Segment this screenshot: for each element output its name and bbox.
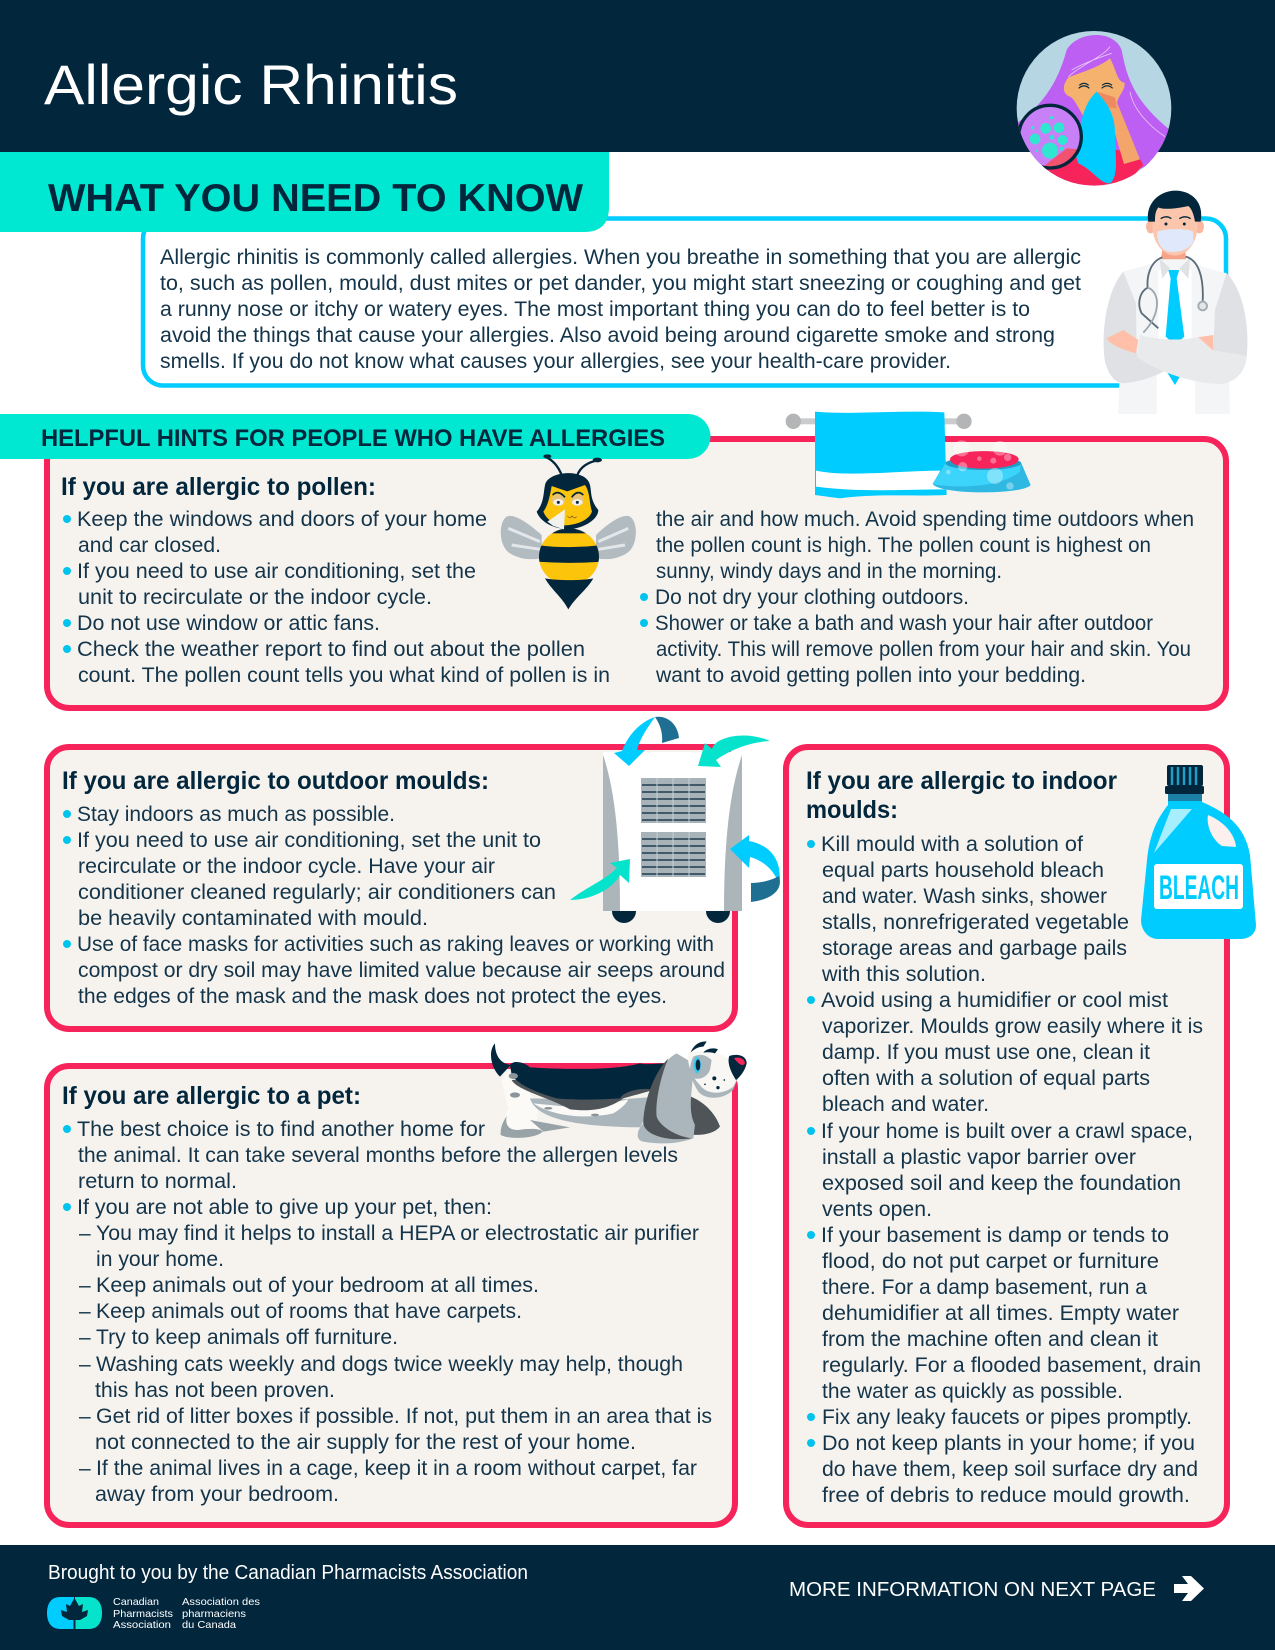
text block: indoor mould hints: install a plastic vapor barrier over [822,1146,1136,1169]
panel: what you need to know [143,218,1226,386]
text block: pollen hints: Do not use window or attic fans. [77,612,380,635]
text block: pollen hints: Check the weather report to find out about the pollen [77,638,585,661]
text block: pet hints: – [79,1326,91,1349]
text block: outdoor mould hints: the edges of the mask and the mask does not protect the eyes. [78,985,667,1008]
text block: pet hints: Keep animals out of your bedroom at all times. [96,1274,539,1297]
text block: outdoor mould hints [77,803,725,1008]
text block: intro paragraph [160,246,1081,373]
text block: indoor mould hints: free of debris to reduce mould growth. [822,1484,1190,1507]
logo wordmark: Association des [182,1596,260,1608]
text block: indoor mould hints: Do not keep plants in your home; if you [822,1432,1195,1455]
heading tab: helpful hints [0,414,710,459]
panel: indoor moulds [786,747,1227,1525]
text block: outdoor mould hints: If you need to use air conditioning, set the unit to [77,829,541,852]
text block: indoor mould hints [821,833,1203,1507]
header band [0,0,1275,152]
logo: Canadian Pharmacists Association [47,1596,260,1631]
text block: indoor mould hints: stalls, nonrefrigerated vegetable [822,911,1129,934]
heading: pet: If you are allergic to a pet: [62,1082,361,1110]
text block: indoor mould hints: vaporizer. Moulds grow easily where it is [822,1015,1203,1038]
text block: pollen hints: count. The pollen count tells you what kind of pollen is in [78,664,610,687]
text block: intro paragraph: a runny nose or itchy or watery eyes. The most important thing you can do to feel better is to [160,298,1030,321]
text block: pet hints: this has not been proven. [95,1379,335,1402]
text block: pet hints: Washing cats weekly and dogs twice weekly may help, though [96,1353,683,1376]
logo wordmark: Canadian [113,1596,159,1608]
logo wordmark: pharmaciens [182,1608,246,1620]
title: Allergic Rhinitis [44,53,458,116]
text block: outdoor mould hints: recirculate or the indoor cycle. Have your air [78,855,495,878]
heading: pollen: If you are allergic to pollen: [61,473,376,501]
text block: intro paragraph: to, such as pollen, mould, dust mites or pet dander, you might start sneezing or coughing and get [160,272,1081,295]
text block: pollen hints: Do not dry your clothing outdoors. [655,586,969,609]
text block: intro paragraph: Allergic rhinitis is commonly called allergies. When you breathe in something that you are allergic [160,246,1081,269]
text block: pollen hints: Keep the windows and doors of your home [77,508,487,531]
text block: pollen hints: want to avoid getting pollen into your bedding. [655,664,1086,687]
text block: pollen hints: and car closed. [78,534,221,557]
text block: indoor mould hints: regularly. For a flooded basement, drain [822,1354,1201,1377]
text block: outdoor mould hints: Use of face masks for activities such as raking leaves or working with [77,933,714,956]
heading: indoor moulds [806,767,1117,824]
heading tab: what you need to know: WHAT YOU NEED TO KNOW [48,177,583,220]
text block: indoor mould hints: bleach and water. [822,1093,989,1116]
text block: pet hints: return to normal. [78,1170,237,1193]
text block: indoor mould hints: damp. If you must use one, clean it [822,1041,1150,1064]
logo wordmark [113,1596,260,1631]
text block: indoor mould hints: Fix any leaky faucets or pipes promptly. [822,1406,1192,1429]
text block: pet hints: – [79,1405,91,1428]
text block: pet hints: Keep animals out of rooms that have carpets. [96,1300,522,1323]
text block: indoor mould hints: exposed soil and keep the foundation [822,1172,1181,1195]
logo wordmark: du Canada [182,1619,236,1631]
text block: indoor mould hints: the water as quickly as possible. [822,1380,1123,1403]
text block: outdoor mould hints: Stay indoors as much as possible. [77,803,395,826]
text block: indoor mould hints: vents open. [822,1198,932,1221]
text block: indoor mould hints: Avoid using a humidifier or cool mist [821,989,1168,1012]
icon: woman sneezing [1017,31,1171,190]
text block: indoor mould hints: Kill mould with a solution of [821,833,1083,856]
logo wordmark: Association [113,1619,171,1631]
bullets: pollen [63,515,648,653]
text block: pet hints: – [79,1457,91,1480]
text block: indoor mould hints: equal parts household bleach [822,859,1104,882]
text block: intro paragraph: smells. If you do not know what causes your allergies, see your health-care provider. [160,350,951,373]
heading tab: what you need to know [0,152,609,232]
text block: indoor mould hints: with this solution. [821,963,986,986]
text block: indoor mould hints: dehumidifier at all times. Empty water [822,1302,1179,1325]
text block: pet hints: – [79,1300,91,1323]
text block: indoor mould hints: there. For a damp basement, run a [822,1276,1147,1299]
arrow: next page [1174,1576,1204,1601]
text block: pollen hints: the air and how much. Avoid spending time outdoors when [656,508,1194,531]
footer band [0,1545,1275,1650]
panel: outdoor moulds [47,747,735,1029]
text block: pet hints: the animal. It can take several months before the allergen levels [78,1144,678,1167]
icon: bleach bottle [1141,765,1256,939]
text block: pet hints: – [79,1274,91,1297]
text block: outdoor mould hints: compost or dry soil may have limited value because air seeps around [78,959,725,982]
logo wordmark: Pharmacists [113,1608,173,1620]
icon: towel and bowl [786,412,1031,498]
text block: pet hints: Get rid of litter boxes if possible. If not, put them in an area that is [96,1405,712,1428]
text block: indoor mould hints: often with a solution of equal parts [822,1067,1150,1090]
panel: pet [47,1066,735,1525]
icon: basset hound [491,1042,747,1143]
text block: pollen hints: activity. This will remove pollen from your hair and skin. You [656,638,1191,661]
bullets: indoor moulds [807,840,815,1447]
text block: indoor mould hints: from the machine often and clean it [822,1328,1158,1351]
bullets: outdoor moulds [63,810,71,948]
icon: air conditioner with arrows [570,717,780,923]
heading tab: helpful hints: HELPFUL HINTS FOR PEOPLE WHO HAVE ALLERGIES [41,425,665,452]
text block: indoor mould hints: and water. Wash sinks, shower [822,885,1107,908]
text block: indoor mould hints: storage areas and garbage pails [822,937,1127,960]
text block: pet hints: If you are not able to give up your pet, then: [77,1196,492,1219]
text block: pollen hints: the pollen count is high. The pollen count is highest on [656,534,1151,557]
text block: pollen hints: If you need to use air conditioning, set the [77,560,476,583]
text block: pet hints: – [79,1222,91,1245]
text block: pet hints: away from your bedroom. [95,1483,339,1506]
next page note: MORE INFORMATION ON NEXT PAGE [789,1579,1156,1601]
footer credit: Brought to you by the Canadian Pharmacists Association [48,1562,528,1584]
text block: pollen hints: unit to recirculate or the indoor cycle. [78,586,432,609]
heading: outdoor moulds: If you are allergic to outdoor moulds: [62,767,489,795]
text block: pet hints: If the animal lives in a cage, keep it in a room without carpet, far [96,1457,697,1480]
text block: indoor mould hints: If your basement is damp or tends to [821,1224,1169,1247]
text block: pet hints: The best choice is to find another home for [77,1118,485,1141]
text block: outdoor mould hints: be heavily contaminated with mould. [78,907,428,930]
text block: pet hints [77,1118,712,1506]
heading: indoor moulds: If you are allergic to indoor [806,767,1117,795]
text block: pollen hints: sunny, windy days and in the morning. [656,560,1002,583]
icon: doctor with mask [1104,191,1247,414]
text block: pet hints: – [79,1353,91,1376]
text block: pet hints: Try to keep animals off furniture. [96,1326,398,1349]
icon: sneezing bee [501,454,636,609]
panel: pollen [47,439,1226,708]
text block: pet hints: not connected to the air supply for the rest of your home. [95,1431,636,1454]
text block: pollen hints [77,508,1194,687]
text block: pet hints: in your home. [96,1248,224,1271]
text block: outdoor mould hints: conditioner cleaned regularly; air conditioners can [78,881,556,904]
text block: indoor mould hints: flood, do not put carpet or furniture [822,1250,1159,1273]
text block: intro paragraph: avoid the things that cause your allergies. Also avoid being around cigarette smoke and strong [160,324,1055,347]
text block: indoor mould hints: If your home is built over a crawl space, [821,1120,1193,1143]
text block: pet hints: You may find it helps to install a HEPA or electrostatic air purifier [96,1222,699,1245]
heading: indoor moulds: moulds: [806,796,898,824]
text block: pollen hints: Shower or take a bath and wash your hair after outdoor [655,612,1153,635]
text block: indoor mould hints: do have them, keep soil surface dry and [822,1458,1198,1481]
bullets: pet [63,1125,71,1211]
